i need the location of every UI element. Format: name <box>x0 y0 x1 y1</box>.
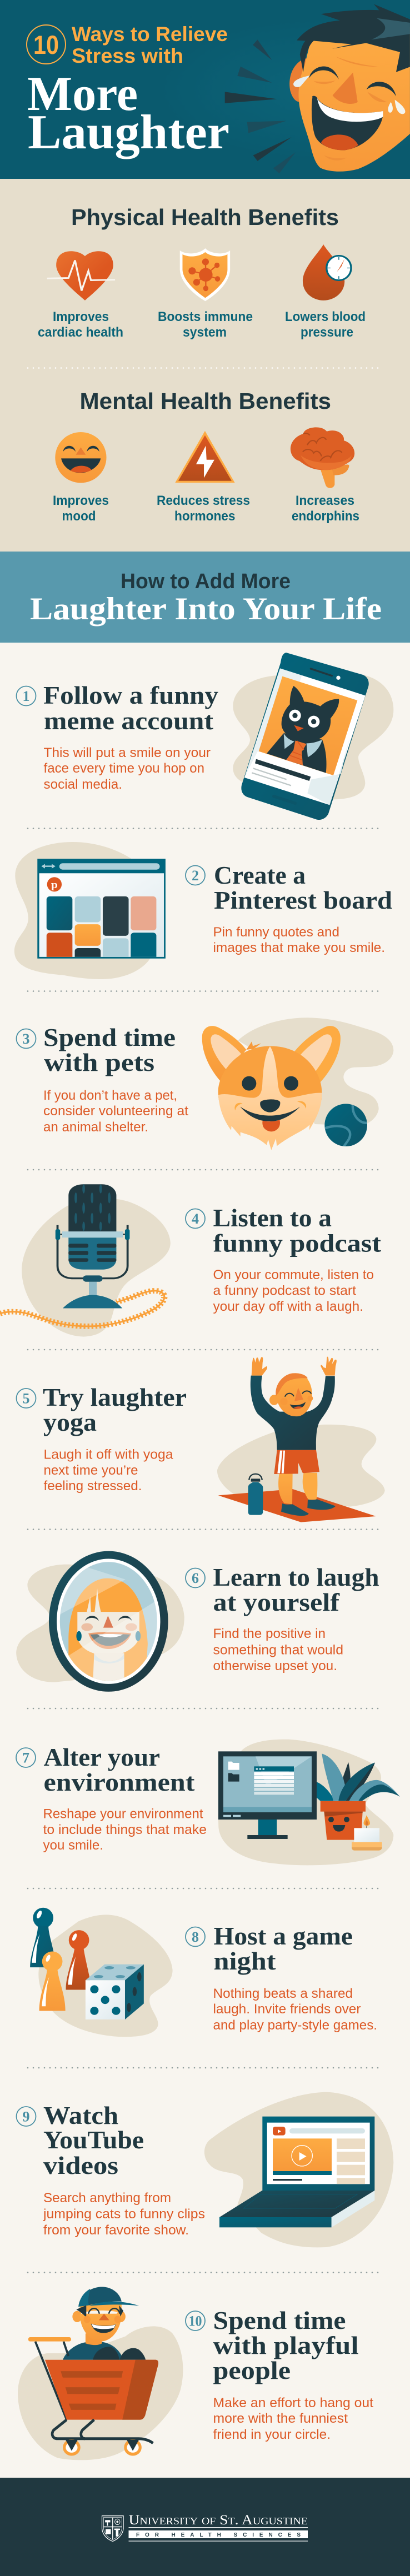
heading <box>43 1383 187 1436</box>
body text: Search anything from <box>43 2191 171 2206</box>
label: lowers blood pressure <box>285 309 366 340</box>
body text: and play party-style games. <box>213 2018 377 2033</box>
heading: Spend time <box>43 1023 176 1051</box>
panel: health benefits <box>0 179 410 552</box>
heading: how to add more: How to Add More <box>121 570 291 593</box>
illustration: phone with cat meme <box>233 653 393 820</box>
body text: images that make you smile. <box>213 940 385 955</box>
number badge 1: 1 <box>22 688 30 704</box>
heading: mental health benefits: Mental Health Benefits <box>80 388 331 414</box>
title: 10 ways to relieve stress with: Stress with <box>72 44 183 67</box>
number badge 9: 9 <box>22 2108 30 2125</box>
body text: next time you’re <box>43 1463 138 1478</box>
number badge 5 <box>17 1389 36 1408</box>
body text: friend in your circle. <box>213 2427 331 2442</box>
body text: Nothing beats a shared <box>213 1986 353 2001</box>
body text: otherwise upset you. <box>213 1658 337 1673</box>
body text: face every time you hop on <box>43 761 204 776</box>
label: improves mood <box>53 493 109 524</box>
heading: laughter into your life: Laughter Into Your Life <box>30 592 382 627</box>
heading: YouTube <box>43 2126 144 2154</box>
heading: Create a <box>214 861 306 889</box>
number badge 7 <box>16 1748 36 1767</box>
label: boosts immune system <box>158 309 253 340</box>
icon: blood drop with gauge <box>303 244 351 300</box>
icon: laughing face with burst rays <box>225 4 410 173</box>
label: increases endorphins: Increases <box>296 493 354 508</box>
illustration: game pawns and die <box>30 1908 173 2037</box>
body text: social media. <box>43 777 122 792</box>
body text: an animal shelter. <box>43 1120 148 1135</box>
illustration: person on yoga mat <box>217 1357 385 1522</box>
label: boosts immune system: system <box>183 325 227 340</box>
logo: for health sciences band <box>129 2527 308 2542</box>
number badge 3 <box>17 1029 36 1049</box>
heading: videos <box>43 2151 118 2179</box>
illustration: smiling woman in mirror <box>16 1551 184 1692</box>
heading: with playful <box>213 2331 359 2359</box>
number badge 6 <box>186 1568 205 1587</box>
body text <box>213 925 385 955</box>
icon: brain <box>291 427 354 488</box>
body text: This will put a smile on your <box>43 745 211 760</box>
icon: heart with pulse <box>47 251 115 300</box>
number badge 10 <box>186 2311 205 2331</box>
heading: Pinterest board <box>214 886 392 914</box>
label: lowers blood pressure: Lowers blood <box>285 309 366 324</box>
body text <box>43 1447 173 1494</box>
number badge 8 <box>186 1927 205 1946</box>
body text: Reshape your environment <box>43 1806 203 1822</box>
label: reduces stress hormones: hormones <box>174 509 236 524</box>
label: lowers blood pressure: pressure <box>301 325 353 340</box>
illustration: corgi and ball <box>202 1018 393 1151</box>
heading: Follow a funny <box>43 681 218 709</box>
panel: how to add more laughter banner <box>0 552 410 643</box>
heading: people <box>213 2356 291 2384</box>
logo: for health sciences band: FOR HEALTH SCIENCES <box>136 2532 301 2538</box>
heading <box>214 861 392 914</box>
heading: night <box>213 1947 276 1975</box>
heading: meme account <box>44 706 214 735</box>
number badge 4: 4 <box>192 1211 199 1227</box>
heading: at yourself <box>213 1588 340 1616</box>
label: improves mood: mood <box>62 509 96 524</box>
heading: Watch <box>43 2101 118 2129</box>
body text: Laugh it off with yoga <box>43 1447 173 1462</box>
panel: hero header <box>0 0 410 179</box>
heading: physical health benefits: Physical Health Benefits <box>71 204 339 230</box>
panel: footer <box>0 2478 410 2576</box>
number badge 10: 10 <box>189 2313 202 2329</box>
body text <box>213 1267 374 1314</box>
heading: yoga <box>43 1408 97 1436</box>
label: boosts immune system: Boosts immune <box>158 309 253 324</box>
body text: jumping cats to funny clips <box>43 2207 205 2222</box>
heading: funny podcast <box>213 1229 382 1257</box>
illustration: browser with pinterest board <box>14 842 166 979</box>
step 5: try laughter yoga <box>17 1357 385 1522</box>
body text: consider volunteering at <box>43 1104 188 1119</box>
step 9: watch youtube videos <box>17 2092 393 2247</box>
number badge 1 <box>17 686 36 705</box>
body text <box>213 2395 373 2442</box>
icon: number 10 badge: 10 <box>33 30 59 59</box>
body text: a funny podcast to start <box>213 1283 356 1299</box>
title: 10 ways to relieve stress with: Ways to Relieve <box>72 23 228 46</box>
step 8: host a game night <box>30 1908 377 2037</box>
body text: Make an effort to hang out <box>213 2395 373 2410</box>
body text: Find the positive in <box>213 1626 326 1641</box>
step 7: alter your environment <box>16 1740 400 1865</box>
body text <box>43 745 211 792</box>
number badge 8: 8 <box>192 1929 199 1945</box>
icon: number 10 badge <box>27 25 66 64</box>
number badge 9 <box>17 2107 36 2126</box>
body text: laugh. Invite friends over <box>213 2002 361 2017</box>
heading <box>213 1204 382 1257</box>
number badge 5: 5 <box>22 1391 30 1406</box>
step 10: spend time with playful people <box>18 2287 373 2460</box>
step 6: learn to laugh at yourself <box>16 1551 379 1692</box>
number badge 2 <box>186 865 205 885</box>
heading: environment <box>43 1768 195 1796</box>
label: improves cardiac health <box>38 309 123 340</box>
body text: Pin funny quotes and <box>213 925 339 940</box>
body text: feeling stressed. <box>43 1479 142 1494</box>
label: reduces stress hormones: Reduces stress <box>157 493 250 508</box>
heading: with pets <box>44 1048 154 1076</box>
heading <box>43 1743 195 1796</box>
body text <box>43 1806 207 1853</box>
body text <box>213 1986 377 2033</box>
heading: Spend time <box>213 2306 346 2334</box>
step 3: spend time with pets <box>17 1018 393 1151</box>
heading <box>213 1922 353 1975</box>
title: more laughter: Laughter <box>28 106 229 159</box>
label: reduces stress hormones <box>157 493 250 524</box>
step 4: listen to a funny podcast <box>0 1184 382 1337</box>
title: more laughter <box>27 67 229 159</box>
label: increases endorphins <box>292 493 359 524</box>
illustration: boy in shopping cart <box>18 2287 183 2460</box>
number badge 3: 3 <box>22 1031 30 1047</box>
label: increases endorphins: endorphins <box>292 509 359 524</box>
heading <box>43 681 218 735</box>
body text: If you don’t have a pet, <box>43 1088 177 1103</box>
heading: Listen to a <box>213 1204 332 1232</box>
body text: more with the funniest <box>213 2411 348 2426</box>
logo: university crest <box>102 2516 123 2542</box>
panel: steps list background <box>0 643 410 1367</box>
number badge 2: 2 <box>192 868 199 884</box>
body text: to include things that make <box>43 1822 207 1837</box>
heading: Host a game <box>213 1922 353 1950</box>
body text <box>43 2191 205 2238</box>
number badge 6: 6 <box>192 1570 199 1586</box>
logo: university of st. augustine wordmark: University of St. Augustine <box>129 2513 308 2528</box>
illustration: monitor, potted plant and candle <box>218 1740 400 1865</box>
heading <box>213 1563 379 1616</box>
body text: something that would <box>213 1643 343 1657</box>
illustration: microphone with cord <box>0 1184 171 1337</box>
heading: Alter your <box>43 1743 160 1771</box>
label: improves cardiac health: cardiac health <box>38 325 123 340</box>
step 1: follow a funny meme account <box>17 653 393 820</box>
icon: smiling face <box>55 432 107 483</box>
illustration: laptop playing a video <box>204 2092 393 2247</box>
body text: On your commute, listen to <box>213 1267 374 1282</box>
heading: Learn to laugh <box>213 1563 379 1591</box>
body text <box>43 1088 188 1135</box>
step 2: create a pinterest board <box>14 842 392 979</box>
title: 10 ways to relieve stress with <box>72 23 228 67</box>
body text: from your favorite show. <box>43 2223 189 2238</box>
heading <box>213 2306 359 2384</box>
body text: your day off with a laugh. <box>213 1299 363 1314</box>
heading <box>43 1023 176 1076</box>
icon: shield with virus <box>180 248 230 301</box>
body text: you smile. <box>43 1838 103 1853</box>
number badge 7: 7 <box>22 1750 29 1766</box>
heading <box>43 2101 144 2179</box>
number badge 4 <box>186 1209 205 1229</box>
heading: Try laughter <box>43 1383 187 1411</box>
label: improves mood: Improves <box>53 493 109 508</box>
illustration: browser with pinterest board: p <box>51 879 58 891</box>
label: improves cardiac health: Improves <box>53 309 109 324</box>
icon: warning triangle with bolt <box>175 431 235 483</box>
body text <box>213 1626 343 1673</box>
title: more laughter: More <box>27 67 138 121</box>
